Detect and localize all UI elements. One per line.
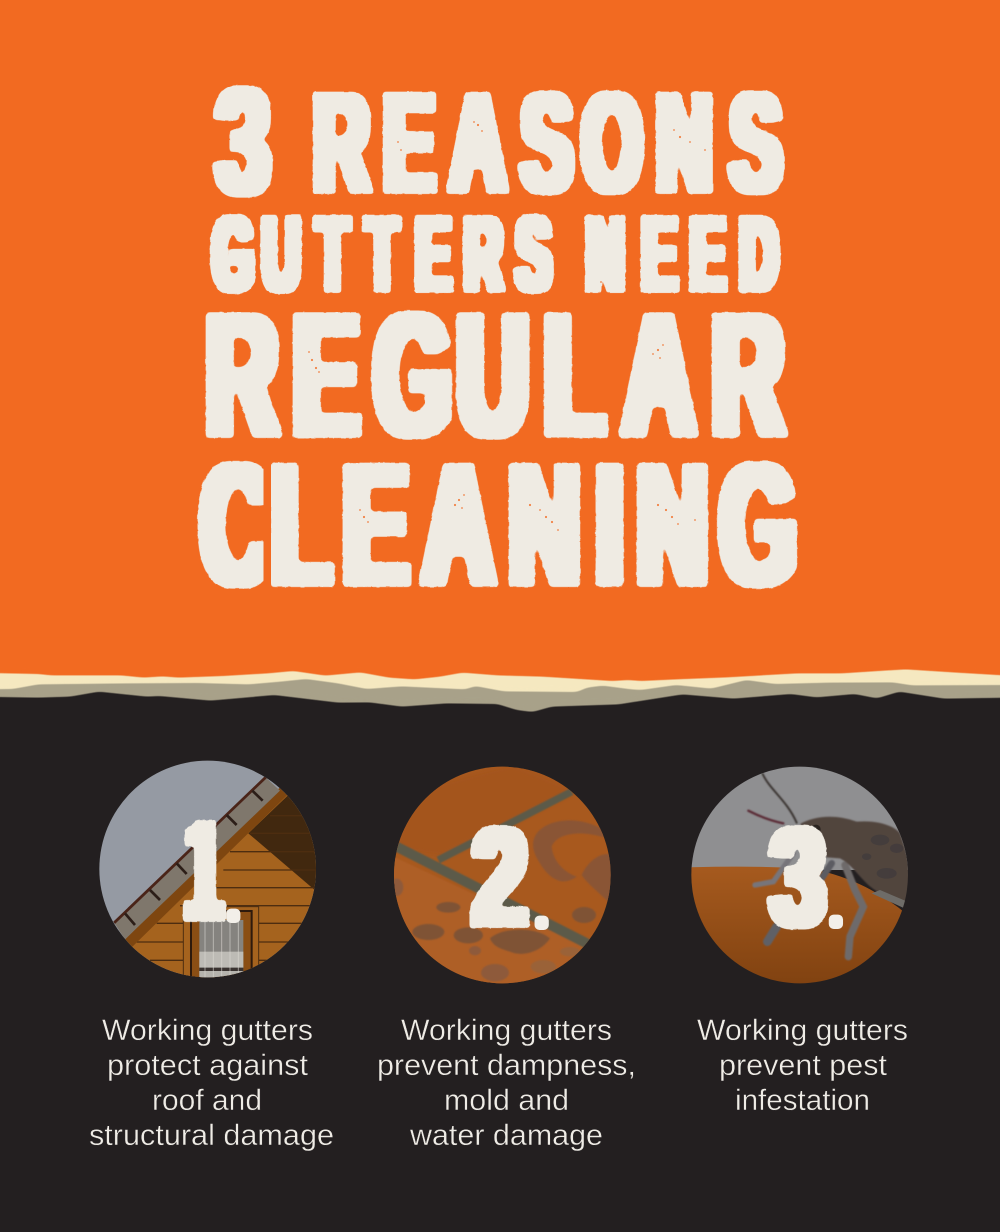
number 1: 1 [183, 765, 225, 958]
orange header background [0, 0, 1000, 660]
text block: reason 3 [697, 1014, 908, 1117]
text block: reason 3: Working gutters [697, 1014, 908, 1047]
text block: reason 2: mold and [444, 1084, 569, 1117]
gap between C and L [264, 455, 271, 595]
number 3: . [832, 898, 840, 931]
text block: reason 2 [377, 1014, 636, 1152]
text block: reason 2: water damage [409, 1119, 603, 1152]
title line: REGULAR: REGULAR [206, 279, 784, 473]
number 2: . [538, 899, 546, 932]
text block: reason 1 [89, 1014, 334, 1152]
text block: reason 1: structural damage [89, 1119, 334, 1152]
circle photo 3: weevil on orange surface [687, 763, 913, 990]
text block: reason 1: roof and [152, 1084, 262, 1117]
number 2: 2 [472, 799, 528, 955]
text block: reason 1: protect against [107, 1049, 309, 1082]
text block: reason 2: Working gutters [401, 1014, 612, 1047]
title line: 3 REASONS: 3 [216, 57, 270, 225]
title line: CLEANING: CLEANING [201, 428, 796, 621]
text block: reason 3: infestation [735, 1084, 870, 1117]
number 1: . [229, 892, 237, 925]
circle photo 1: house roof [99, 760, 316, 978]
title speckle texture [308, 121, 706, 531]
text block: reason 2: prevent dampness, [377, 1049, 636, 1082]
text block: reason 1: Working gutters [102, 1014, 313, 1047]
circle photo 2: wet roof tiles [390, 763, 617, 990]
title line: 3 REASONS: REASONS [314, 65, 781, 221]
text block: reason 3: prevent pest [719, 1049, 888, 1082]
number 3: 3 [770, 799, 826, 955]
torn paper divider [0, 637, 1000, 712]
title [201, 57, 796, 621]
title line: GUTTERS NEED: GUTTERS NEED [213, 195, 778, 313]
